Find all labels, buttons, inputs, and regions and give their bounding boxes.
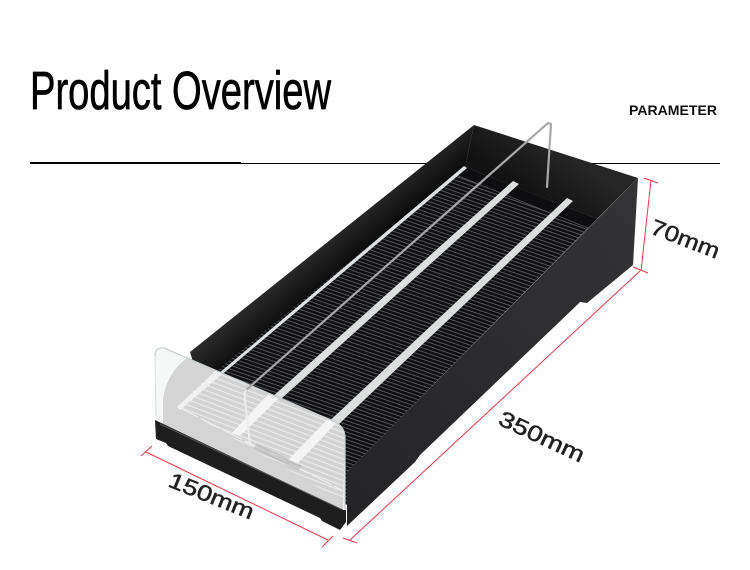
dimension: 350mm: 350mm	[495, 406, 589, 467]
dimension: 70mm: 70mm	[647, 214, 723, 263]
dimension: 350mm	[343, 271, 640, 543]
ribbed floor	[170, 167, 597, 505]
metal wire divider	[245, 123, 551, 445]
plate inner shadow	[163, 356, 345, 515]
dimension: 150mm: 150mm	[165, 467, 258, 524]
tray back inner wall	[465, 125, 638, 219]
dimension: 70mm	[633, 178, 723, 273]
tray right outer wall	[347, 178, 638, 526]
tray front base	[155, 420, 346, 530]
back dark band	[456, 167, 597, 228]
dimension: 150mm	[141, 446, 333, 547]
rails	[179, 166, 573, 464]
parameter label: PARAMETER	[629, 102, 717, 118]
tray left inner wall	[190, 125, 474, 385]
header rule	[30, 162, 720, 164]
product: display tray	[155, 123, 638, 530]
title: Product Overview	[30, 61, 332, 121]
transparent front plate	[155, 348, 345, 515]
